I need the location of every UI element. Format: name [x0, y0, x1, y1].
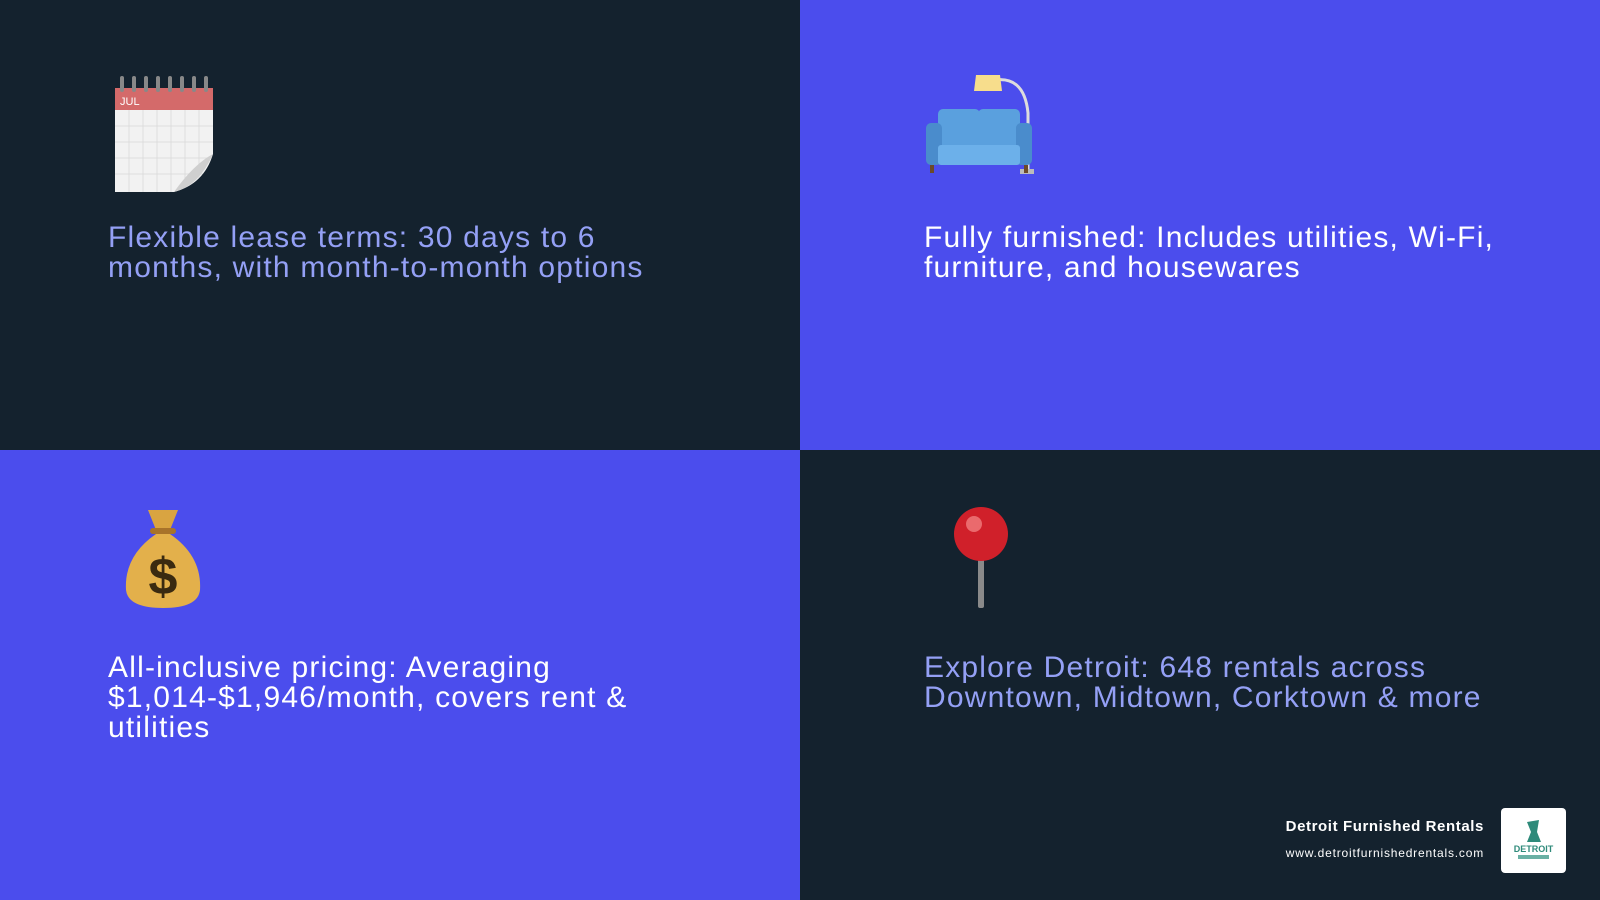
- icon: calendar: [115, 76, 213, 192]
- text: all-inclusive pricing: All-inclusive pricing: Averaging: [108, 651, 551, 684]
- brand footer: [1286, 808, 1566, 873]
- text: fully furnished: furniture, and housewares: [924, 251, 1301, 284]
- panel: flexible lease: [0, 0, 800, 450]
- icon: pushpin: [954, 507, 1008, 608]
- text: fully furnished: [924, 221, 1494, 284]
- text: explore detroit: [924, 651, 1482, 714]
- text: flexible lease terms: [108, 221, 644, 284]
- panel: fully furnished: [800, 0, 1600, 450]
- text: explore detroit: Explore Detroit: 648 rentals across: [924, 651, 1426, 684]
- panel: explore detroit: [800, 450, 1600, 900]
- logo: DETROIT: [1514, 844, 1554, 854]
- logo: [1501, 808, 1566, 873]
- text: flexible lease terms: months, with month-to-month options: [108, 251, 644, 284]
- icon: money bag: [126, 510, 200, 608]
- text: fully furnished: Fully furnished: Includes utilities, Wi-Fi,: [924, 221, 1494, 254]
- text: explore detroit: Downtown, Midtown, Corktown & more: [924, 681, 1482, 714]
- text: flexible lease terms: Flexible lease terms: 30 days to 6: [108, 221, 596, 254]
- brand url: www.detroitfurnishedrentals.com: [1286, 846, 1484, 860]
- brand name: Detroit Furnished Rentals: [1286, 818, 1484, 835]
- text: all-inclusive pricing: utilities: [108, 711, 210, 744]
- icon: calendar: JUL: [120, 96, 140, 108]
- text: all-inclusive pricing: $1,014-$1,946/month, covers rent &: [108, 681, 627, 714]
- icon: sofa and lamp: [926, 75, 1034, 174]
- text: all-inclusive pricing: [108, 651, 627, 744]
- icon: money bag: $: [149, 548, 178, 606]
- panel: all-inclusive pricing: [0, 450, 800, 900]
